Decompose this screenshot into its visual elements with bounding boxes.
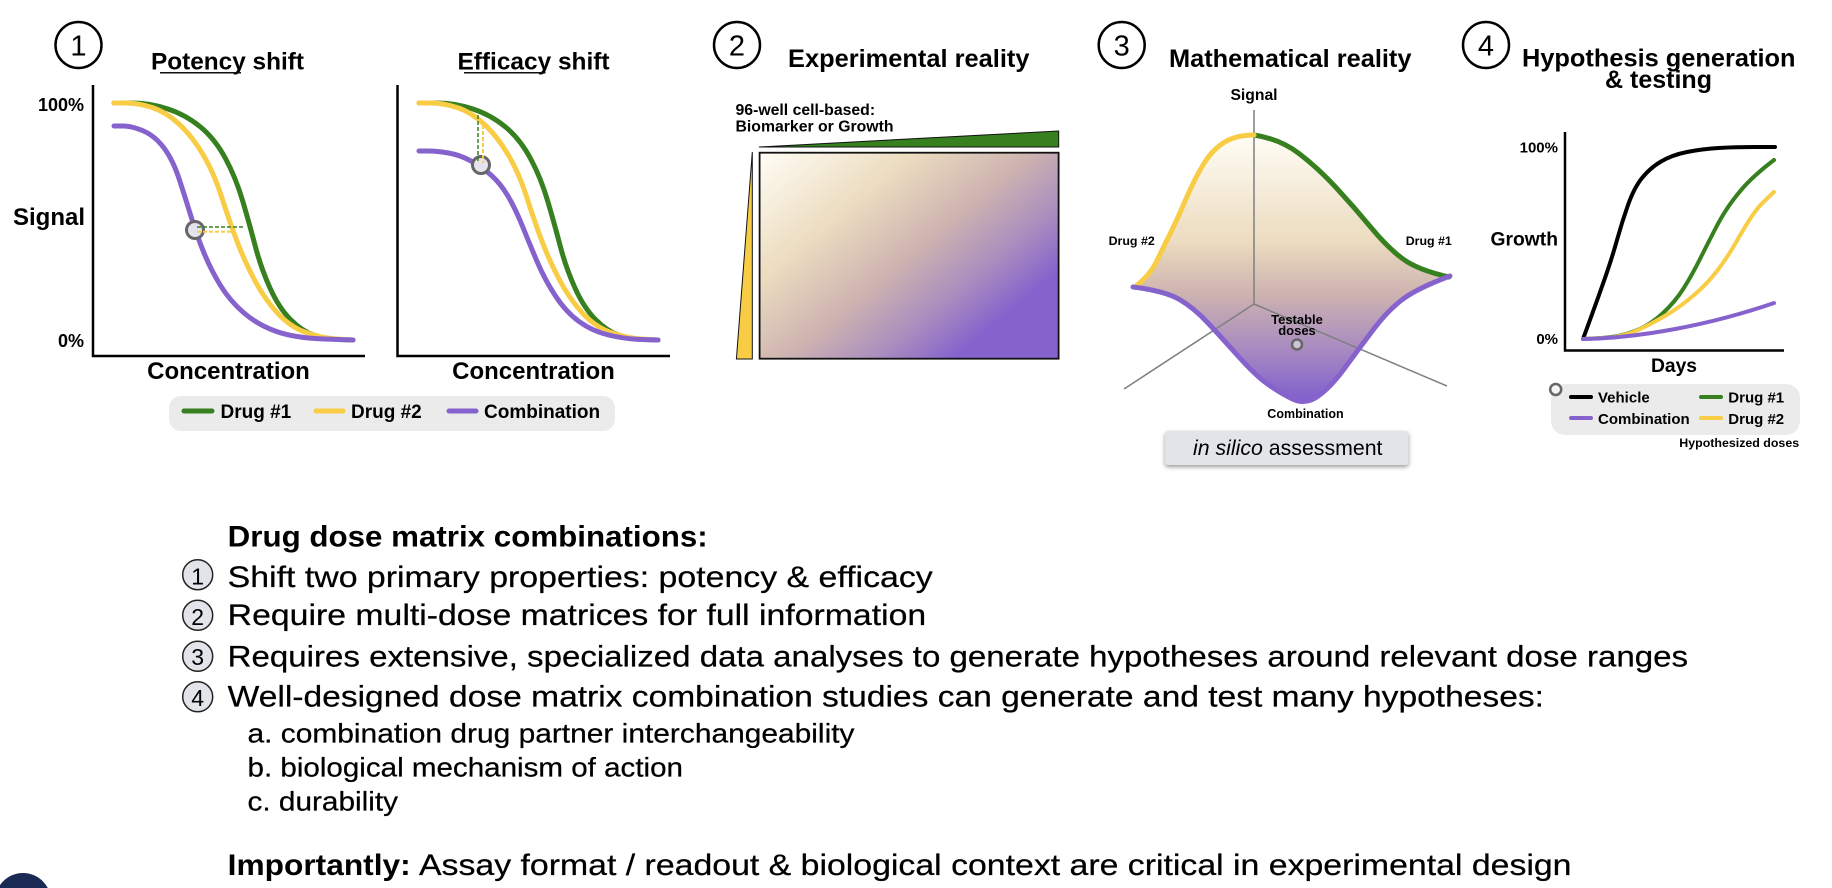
callout: in silico assessment bbox=[1165, 431, 1408, 465]
y axis labels: 100% bbox=[38, 95, 84, 115]
heading: efficacy shift: Efficacy shift bbox=[458, 48, 610, 76]
surface axis labels: Drug #2 bbox=[1109, 234, 1155, 248]
note: hypothesized doses: Hypothesized doses bbox=[1679, 436, 1799, 450]
point 4: Well-designed dose matrix combination studies can generate and test many hypotheses: bbox=[228, 681, 1544, 714]
chart: growth curves bbox=[1565, 132, 1784, 350]
number badge 3 bbox=[1099, 22, 1145, 68]
legend: growth curves: Drug #2 bbox=[1728, 411, 1784, 428]
legend: growth curves: Drug #1 bbox=[1728, 390, 1784, 407]
axis labels: 100% bbox=[1520, 140, 1558, 157]
heading: experimental reality: Experimental reality bbox=[788, 45, 1030, 73]
surface axis labels: Combination bbox=[1267, 407, 1344, 421]
sub-points a to c: a. combination drug partner interchangeability bbox=[248, 719, 855, 749]
panel 4: hypothesis generation and testing bbox=[1463, 22, 1800, 450]
legend: drugs and combination: Drug #1 bbox=[220, 402, 292, 423]
panel 3: mathematical reality bbox=[1099, 22, 1452, 465]
x axis labels bbox=[147, 358, 615, 385]
y axis labels: Signal bbox=[13, 204, 85, 231]
heading: hypothesis generation and testing: & testing bbox=[1605, 66, 1712, 94]
legend: growth curves: Combination bbox=[1598, 411, 1690, 428]
chart: potency dose-response curves bbox=[93, 85, 365, 356]
point 4: 4 bbox=[191, 685, 204, 711]
drug 1 dose wedge bbox=[759, 131, 1059, 147]
corner badge, cropped by page edge bbox=[0, 873, 51, 888]
axis labels bbox=[1491, 140, 1697, 377]
legend: drugs and combination bbox=[169, 396, 615, 431]
x axis labels: Concentration bbox=[147, 358, 310, 385]
assay format label bbox=[736, 102, 894, 136]
heading: hypothesis generation and testing: Hypothesis generation bbox=[1522, 45, 1796, 73]
surface axis labels bbox=[1109, 87, 1452, 421]
dose matrix gradient bbox=[760, 153, 1059, 359]
point 1: 1 bbox=[191, 564, 204, 590]
assay format label: Biomarker or Growth bbox=[736, 119, 894, 136]
number badge 3: 3 bbox=[1114, 30, 1130, 62]
heading: hypothesis generation and testing bbox=[1522, 45, 1796, 94]
point 3: Requires extensive, specialized data analyses to generate hypotheses around relevant dose ranges bbox=[228, 641, 1688, 674]
drug 2 dose wedge bbox=[736, 152, 752, 359]
point 2: Require multi-dose matrices for full information bbox=[228, 599, 926, 632]
sub-points a to c bbox=[248, 719, 855, 817]
callout: in silico assessment: in silico assessment bbox=[1193, 437, 1383, 460]
number badge 2 bbox=[714, 22, 760, 68]
axis labels: Growth bbox=[1491, 230, 1558, 251]
y axis labels: 0% bbox=[58, 331, 84, 351]
testable doses marker: Testable bbox=[1271, 312, 1323, 327]
importantly note: Importantly: bbox=[228, 849, 411, 882]
testable doses marker bbox=[1271, 312, 1323, 350]
legend: growth curves bbox=[1550, 384, 1800, 435]
legend: growth curves: Vehicle bbox=[1598, 390, 1650, 407]
testable doses marker: doses bbox=[1278, 323, 1316, 338]
point 2: 2 bbox=[191, 604, 204, 630]
number badge 1 bbox=[56, 22, 102, 68]
number badge 4: 4 bbox=[1478, 30, 1494, 62]
summary text block bbox=[183, 521, 1688, 882]
legend: drugs and combination: Drug #2 bbox=[351, 402, 422, 423]
chart: efficacy dose-response curves bbox=[398, 85, 670, 356]
heading: mathematical reality: Mathematical reality bbox=[1169, 45, 1412, 73]
number badge 2: 2 bbox=[729, 30, 745, 62]
axis labels: Days bbox=[1651, 356, 1697, 377]
point 3: 3 bbox=[191, 644, 204, 670]
axis labels: 0% bbox=[1536, 331, 1558, 348]
surface axis labels: Signal bbox=[1230, 87, 1278, 104]
heading: potency shift: Potency shift bbox=[151, 48, 304, 76]
y axis labels bbox=[13, 95, 85, 351]
summary heading: Drug dose matrix combinations: bbox=[228, 521, 708, 554]
panel 2: experimental reality bbox=[714, 22, 1059, 359]
x axis labels: Concentration bbox=[452, 358, 615, 385]
number badge 4 bbox=[1463, 22, 1509, 68]
panel 1: potency and efficacy shift bbox=[13, 22, 670, 431]
surface axis labels: Drug #1 bbox=[1406, 234, 1452, 248]
assay format label: 96-well cell-based: bbox=[736, 102, 875, 119]
number badge 1: 1 bbox=[70, 30, 87, 62]
importantly note: Assay format / readout & biological context are critical in experimental design bbox=[419, 849, 1572, 882]
point 1: Shift two primary properties: potency & efficacy bbox=[228, 561, 933, 594]
sub-points a to c: c. durability bbox=[248, 787, 399, 817]
legend: drugs and combination: Combination bbox=[484, 402, 600, 423]
3D response surface bbox=[1124, 110, 1450, 401]
sub-points a to c: b. biological mechanism of action bbox=[248, 753, 683, 783]
